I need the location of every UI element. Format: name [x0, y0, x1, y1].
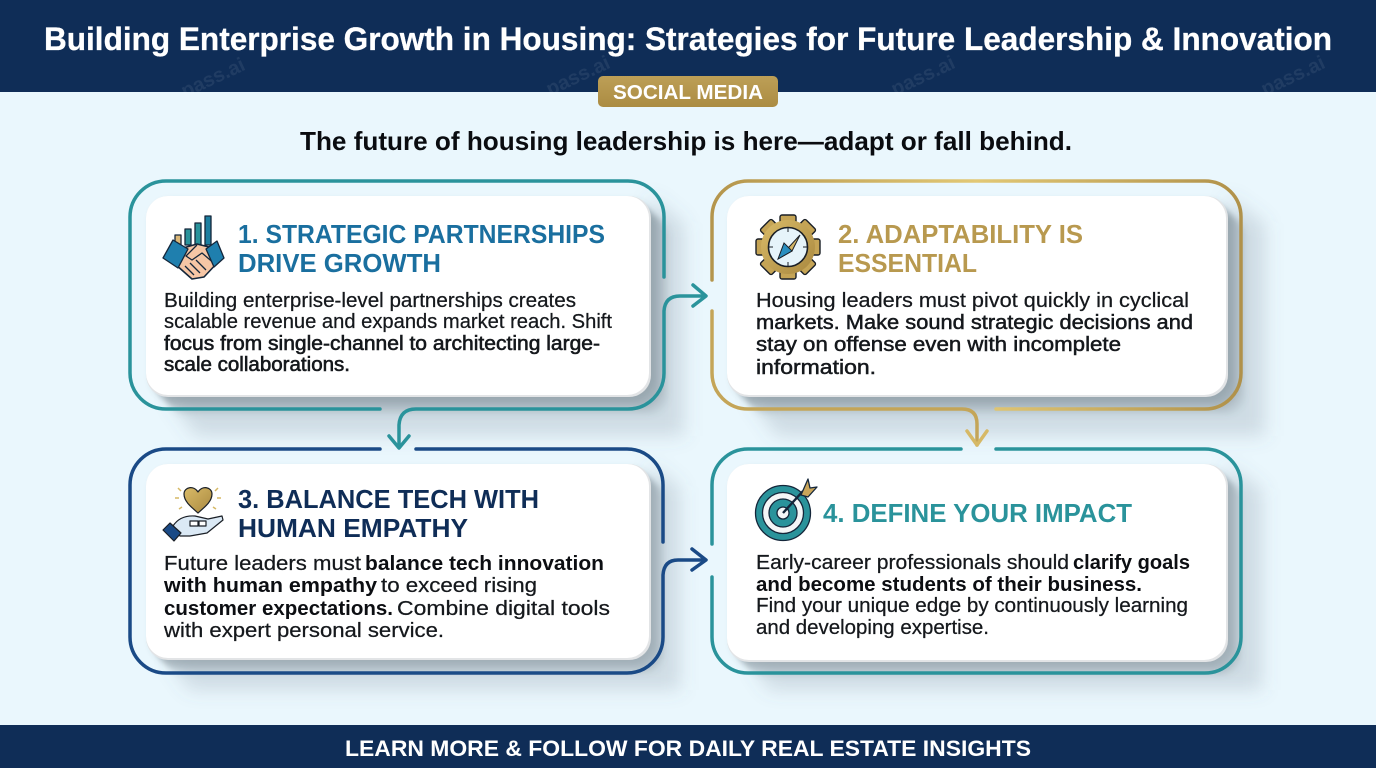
arrow: panel 1 to 2 and 3 — [389, 285, 706, 448]
footer banner: LEARN MORE & FOLLOW FOR DAILY REAL ESTATE INSIGHTS — [345, 736, 1031, 761]
heading 3 — [238, 484, 539, 543]
body text 3: with expert personal service. — [163, 620, 444, 642]
near card shadows — [149, 199, 1246, 676]
card 2 edge — [727, 196, 1228, 397]
body text 2 — [756, 290, 1193, 379]
title: Building Enterprise Growth in Housing: Strategies for Future Leadership & Innovation — [44, 21, 1332, 57]
body text 3: with human empathy — [163, 575, 378, 597]
body text 1: Building enterprise-level partnerships creates — [164, 290, 576, 312]
card 1 edge — [146, 196, 651, 397]
body text 3: Combine digital tools — [397, 598, 610, 620]
body text 1 — [164, 290, 612, 376]
card 3 — [146, 464, 649, 658]
body text 2: markets. Make sound strategic decisions and — [756, 312, 1193, 334]
body text 3: Future leaders must — [164, 553, 361, 575]
card 4 edge — [727, 464, 1228, 662]
body text 3: to exceed rising — [381, 575, 537, 597]
panel 4: define your impact — [712, 449, 1241, 673]
heading 1: DRIVE GROWTH — [238, 248, 441, 278]
card 1 — [146, 196, 649, 395]
soft outer card shadows — [168, 196, 1265, 690]
body text 1: focus from single-channel to architecting large- — [164, 333, 600, 355]
heading 2: ESSENTIAL — [838, 248, 977, 278]
body text 4: and become students of their business. — [756, 574, 1142, 596]
heading 3: 3. BALANCE TECH WITH — [238, 484, 539, 514]
panel 3: balance tech — [146, 449, 663, 660]
frame 4 — [712, 449, 1241, 673]
footer banner — [0, 725, 1376, 768]
heading 2: 2. ADAPTABILITY IS — [838, 219, 1083, 249]
body text 3: balance tech innovation — [365, 553, 604, 575]
watermarks: pass.ai — [1258, 52, 1329, 101]
icon: heart and robotic hand — [163, 488, 223, 541]
heading 4: 4. DEFINE YOUR IMPACT — [823, 498, 1132, 528]
frame 3 — [416, 449, 663, 542]
heading 3: HUMAN EMPATHY — [238, 513, 468, 543]
icon: target with arrow — [756, 479, 817, 540]
body text 1: scale collaborations. — [164, 354, 350, 376]
body text 2: Housing leaders must pivot quickly in cyclical — [756, 290, 1189, 312]
arrow: panel 2 to 4 — [712, 311, 987, 445]
watermarks — [178, 52, 1329, 103]
panel 1: strategic partnerships — [130, 181, 664, 409]
body text 4: Early-career professionals should — [756, 552, 1069, 574]
card 2 — [727, 196, 1226, 395]
body text 3: customer expectations. — [164, 598, 393, 620]
body text 3 — [163, 553, 610, 642]
badge: social media — [598, 76, 778, 107]
badge: social media: SOCIAL MEDIA — [613, 82, 763, 104]
panel 2: adaptability — [712, 181, 1241, 409]
watermarks: pass.ai — [888, 52, 959, 101]
icon: compass gear — [756, 215, 820, 279]
body text 4: Find your unique edge by continuously learning — [756, 595, 1188, 617]
card 4 — [727, 464, 1226, 660]
body text 1: scalable revenue and expands market reach. Shift — [164, 311, 612, 333]
heading 1: 1. STRATEGIC PARTNERSHIPS — [238, 219, 605, 249]
body text 2: stay on offense even with incomplete — [756, 334, 1121, 356]
heading 2 — [838, 219, 1083, 278]
card 3 edge — [146, 464, 651, 660]
frame 2 — [712, 181, 1241, 409]
body text 2: information. — [756, 357, 876, 379]
icon: handshake with bar chart — [163, 216, 224, 279]
body text 4: clarify goals — [1073, 552, 1190, 574]
frame 1 — [130, 181, 664, 409]
body text 4: and developing expertise. — [756, 617, 989, 639]
arrow: panel 3 to 4 — [130, 449, 706, 673]
header banner — [0, 0, 1376, 103]
heading 1 — [238, 219, 605, 278]
watermarks: pass.ai — [543, 52, 614, 101]
subtitle: The future of housing leadership is here—adapt or fall behind. — [300, 126, 1072, 156]
body text 4 — [756, 552, 1190, 639]
watermarks: pass.ai — [178, 54, 249, 103]
